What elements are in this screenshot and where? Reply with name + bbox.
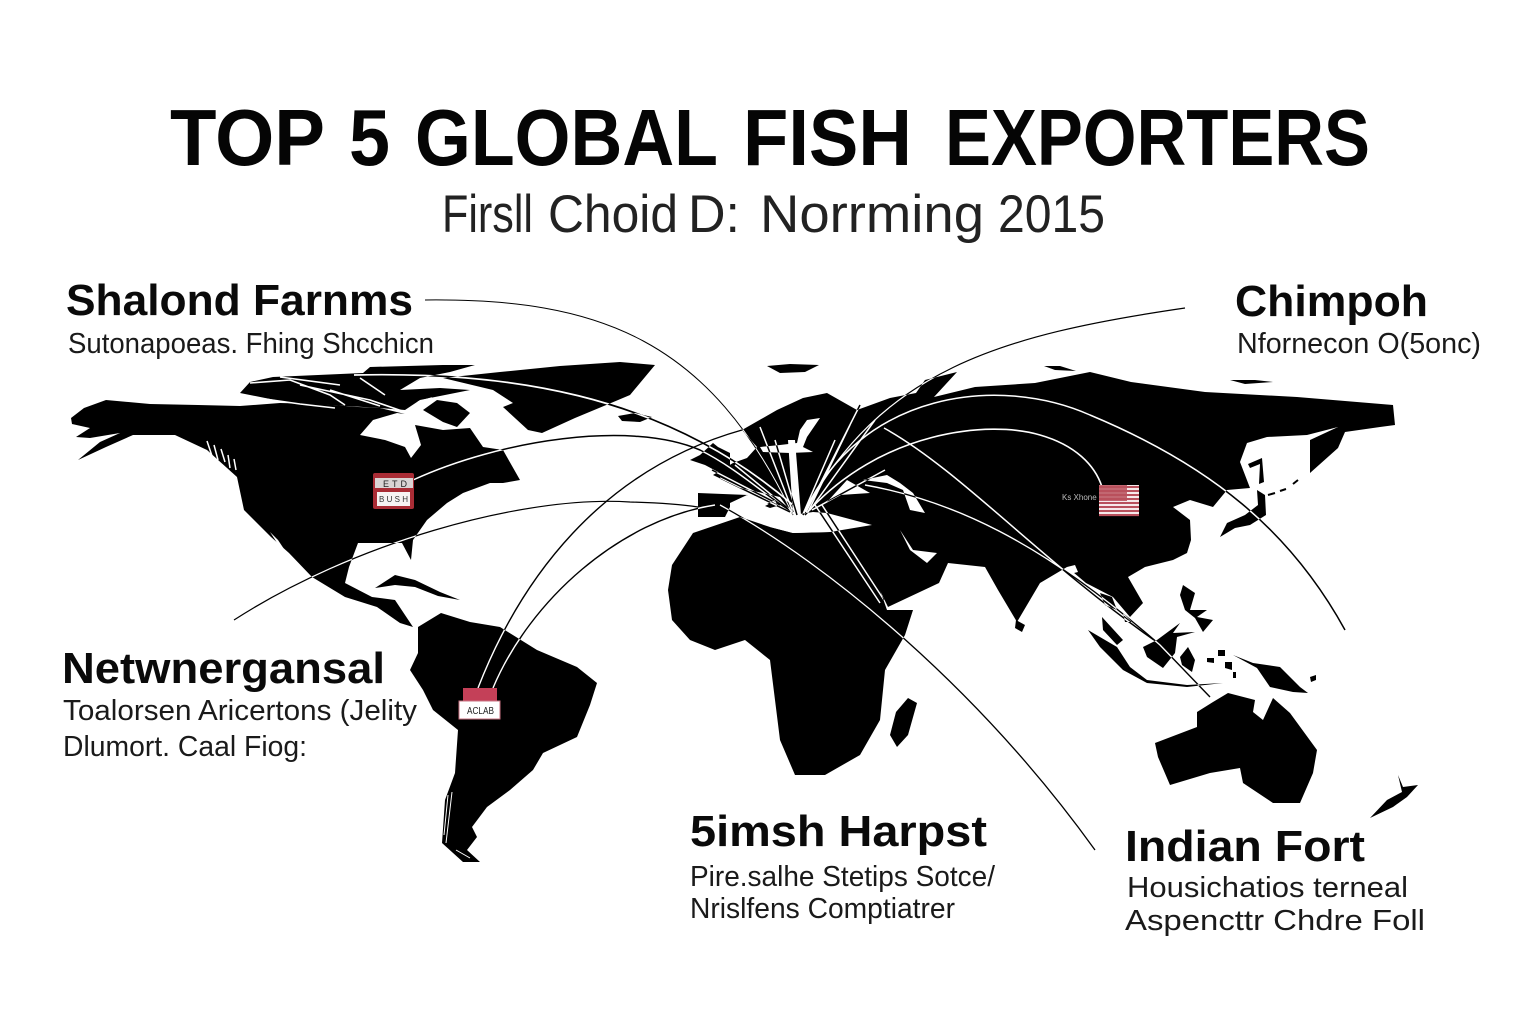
Black Sea: [827, 480, 870, 502]
Baja California: [270, 532, 298, 570]
flag: China region: Ks Xhone: [1062, 493, 1097, 502]
title: 5: [349, 93, 390, 182]
land: Arctic islands: [240, 365, 475, 410]
label: Shalond Farnms: Sutonapoeas. Fhing Shcchicn: [68, 328, 434, 360]
flag: South America: ACLAB: [467, 706, 494, 717]
world map: [71, 362, 1418, 862]
label: Netwnergansal: Dlumort. Caal Fiog:: [63, 731, 307, 763]
label: 5imsh Harpst: Pire.salhe Stetips Sotce/: [690, 861, 996, 893]
Italy islet over sea: [765, 501, 777, 508]
land: Africa: [668, 517, 913, 775]
Baffin streak: [418, 398, 432, 402]
label: Chimpoh: Nfornecon O(5onc): [1237, 328, 1481, 360]
Bay of Bengal islet gap: [1067, 565, 1078, 574]
fan: thick white wedge: [788, 440, 801, 515]
land: Baffin Island: [423, 400, 470, 427]
label: Indian Fort: Housichatios terneal: [1127, 872, 1408, 904]
label: Indian Fort: Indian Fort: [1125, 822, 1365, 871]
land: Novaya Zemlya: [767, 364, 819, 373]
land: Sri Lanka: [1015, 620, 1025, 632]
flag: North America: [373, 473, 414, 509]
arc: Southeast Asia: [884, 428, 1154, 640]
title: TOP: [170, 93, 325, 182]
title: EXPORTERS: [945, 93, 1370, 182]
subtitle: Firsll: [442, 185, 533, 244]
land: North America: [71, 400, 520, 627]
land: United Kingdom: [690, 443, 730, 473]
land: New Zealand fish shape: [1370, 775, 1418, 818]
label: Chimpoh: [1235, 277, 1481, 360]
subtitle: Norrming: [760, 185, 984, 244]
land: Iceland: [618, 413, 652, 422]
arc: Australia: [865, 485, 1210, 697]
label: Indian Fort: [1125, 822, 1425, 937]
arc: South America flag west: [478, 430, 742, 688]
label: 5imsh Harpst: 5imsh Harpst: [690, 807, 987, 856]
arc: Netwnergansal: [234, 501, 698, 620]
land: Borneo: [1143, 623, 1195, 668]
title: GLOBAL: [415, 93, 718, 182]
arc: Pacific route: [803, 395, 1345, 630]
land: Malay islands: [1100, 593, 1132, 622]
land: Iberia: [698, 493, 748, 517]
flag: China region: [1062, 485, 1139, 516]
arc: Red Sea pair: [815, 505, 884, 603]
Mediterranean Sea: [730, 495, 872, 533]
land: South America: [410, 613, 597, 862]
land: Japan: [1220, 490, 1266, 537]
fan: Europe convergence: [712, 405, 885, 515]
Caspian and Aral Seas: [863, 475, 925, 513]
Baltic Sea: [760, 418, 820, 453]
subtitle: 2015: [998, 185, 1105, 244]
Arctic streaks: [250, 377, 405, 412]
arc: Chimpoh: [803, 308, 1185, 515]
arc: Arctic route: [354, 375, 793, 505]
title: [170, 93, 1370, 182]
land: Malaya north islands: [1102, 617, 1123, 645]
flag: North America: ETD: [383, 479, 408, 489]
flag: South America: [459, 688, 500, 719]
land: Solomon islets: [1310, 675, 1316, 682]
arc: North America flag: [413, 436, 793, 512]
label: 5imsh Harpst: Nrislfens Comptiatrer: [690, 893, 955, 925]
land: Sakhalin: [1248, 458, 1264, 484]
flag: North America: BUSH: [379, 495, 408, 504]
subtitle: D:: [688, 185, 740, 244]
subtitle: Choid: [548, 185, 678, 244]
land: Sulawesi: [1180, 647, 1195, 672]
trade route arcs: [234, 300, 1345, 850]
inland waters and coastal detail: [207, 377, 1078, 858]
land: Madagascar: [890, 698, 917, 747]
Persian Gulf: [900, 530, 937, 563]
land: Philippines: [1180, 585, 1213, 632]
land: small Indonesian islands: [1207, 650, 1236, 678]
label: Netwnergansal: Netwnergansal: [62, 644, 385, 693]
land: Cuba and Caribbean: [375, 575, 460, 600]
land: Kuril chain: [1268, 480, 1298, 495]
title: FISH: [743, 93, 912, 182]
land: Eurasia: [713, 372, 1395, 622]
arc: Indian Fort: [720, 505, 1095, 850]
land: Arctic Russia islets: [1044, 366, 1273, 384]
land: Italy and Sicily: [765, 500, 777, 507]
arc: Shalond Farnms: [425, 300, 793, 515]
label: Indian Fort: Aspencttr Chdre Foll: [1125, 905, 1425, 937]
land: Australia: [1155, 693, 1317, 803]
arc: South America flag east: [493, 505, 715, 688]
label: 5imsh Harpst: [690, 807, 996, 925]
Chile hatching: [444, 792, 470, 858]
arc: China flag: [805, 429, 1102, 515]
label: Netwnergansal: [62, 644, 418, 763]
land: Sumatra and Java: [1088, 630, 1223, 687]
label: Shalond Farnms: [66, 276, 434, 360]
label: Chimpoh: Chimpoh: [1235, 277, 1428, 326]
land: New Guinea: [1233, 655, 1308, 693]
subtitle: [442, 185, 1105, 244]
label: Shalond Farnms: Shalond Farnms: [66, 276, 413, 325]
Alaska coast hatching: [207, 441, 236, 470]
land: Greenland: [443, 362, 655, 433]
label: Netwnergansal: Toalorsen Aricertons (Jelity: [63, 695, 418, 727]
